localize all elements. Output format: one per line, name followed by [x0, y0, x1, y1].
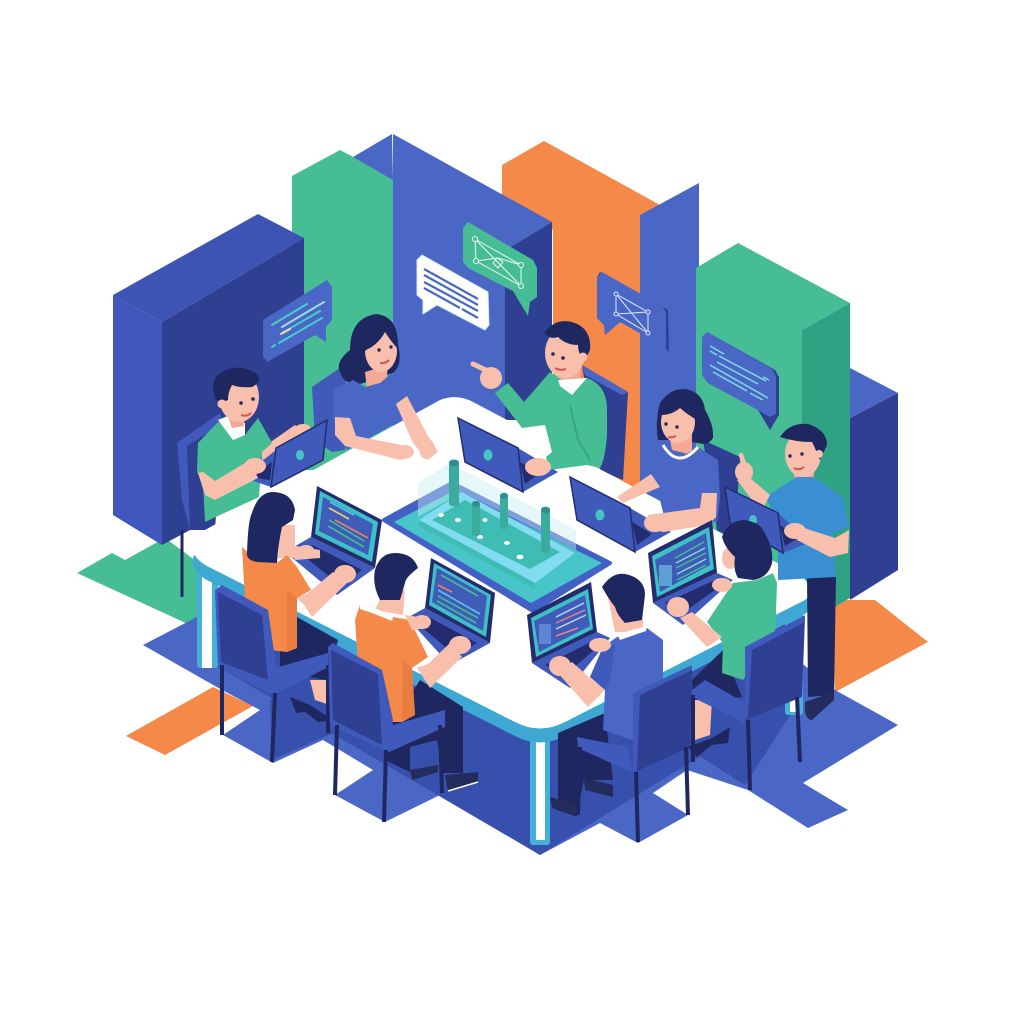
table legs: [197, 565, 803, 845]
under-table shadow volume: [210, 590, 800, 855]
person: man in orange, front, with chair: [328, 553, 478, 822]
speech bubble: blue network: [597, 272, 669, 352]
laptop: front row 3: [527, 582, 610, 688]
person: woman in blue, back right: [617, 389, 720, 532]
speech bubble: white text: [417, 255, 489, 330]
center hologram: [384, 460, 610, 611]
back chairs: [177, 365, 740, 597]
laptop: front row 4: [648, 520, 733, 625]
laptop: front row 1: [285, 486, 382, 595]
table edge: [192, 411, 810, 742]
laptop: front row 2: [407, 558, 495, 665]
speech bubble: green network: [463, 222, 537, 316]
person: man in blue shirt, standing: [735, 424, 849, 720]
table top: [192, 397, 810, 728]
arm: standing man typing: [784, 523, 849, 557]
speech bubble: code right: [702, 332, 779, 430]
person: man in blue, front, with chair: [549, 574, 692, 842]
person: woman in blue, back left: [333, 314, 438, 460]
person: woman in green, front right, with chair: [667, 520, 805, 790]
laptop: back row 1: [242, 420, 327, 487]
person: woman in orange, front left, with chair: [215, 492, 356, 762]
person: man in green sweater, pointing: [473, 321, 607, 476]
laptop: back row 4: [725, 487, 810, 553]
floor tiles: [77, 420, 928, 855]
person: man in green, left: [197, 368, 312, 522]
laptop: back row 3: [570, 477, 671, 552]
arm: left man typing: [198, 458, 266, 500]
speech bubble: code left: [263, 280, 332, 362]
laptop: back row 2: [458, 418, 558, 492]
background wall blocks: [113, 134, 898, 610]
